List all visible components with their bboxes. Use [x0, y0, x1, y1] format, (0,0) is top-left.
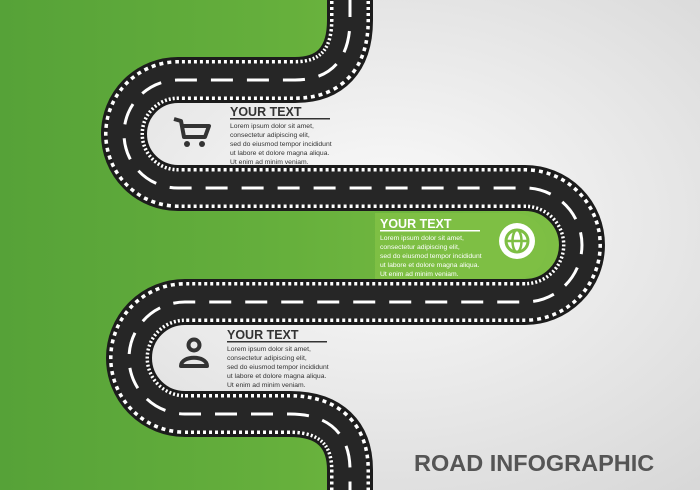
title: ROAD INFOGRAPHIC: [414, 450, 654, 476]
text block 2: consectetur adipiscing elit,: [380, 244, 460, 251]
text block 3: [227, 328, 329, 389]
road: [124, 0, 582, 490]
text block 3: sed do eiusmod tempor incididunt: [227, 364, 329, 371]
text block 3: Lorem ipsum dolor sit amet,: [227, 346, 311, 353]
text block 2: Ut enim ad minim veniam.: [380, 271, 459, 278]
text block 1: consectetur adipiscing elit,: [230, 132, 310, 139]
text block 1: sed do eiusmod tempor incididunt: [230, 141, 332, 148]
text block 2: ut labore et dolore magna aliqua.: [380, 262, 479, 269]
text block 2: sed do eiusmod tempor incididunt: [380, 253, 482, 260]
icon: person: [181, 340, 207, 366]
text block 1: YOUR TEXT: [230, 105, 302, 119]
text block 3: consectetur adipiscing elit,: [227, 355, 307, 362]
text block 1: Lorem ipsum dolor sit amet,: [230, 123, 314, 130]
text block 3: YOUR TEXT: [227, 328, 299, 342]
text block 1: Ut enim ad minim veniam.: [230, 159, 309, 166]
green pill: [375, 213, 547, 279]
text block 3: Ut enim ad minim veniam.: [227, 382, 306, 389]
text block 2: [380, 217, 482, 278]
text block 2: YOUR TEXT: [380, 217, 452, 231]
text block 3: ut labore et dolore magna aliqua.: [227, 373, 326, 380]
text block 2: Lorem ipsum dolor sit amet,: [380, 235, 464, 242]
icon: globe: [499, 223, 535, 259]
text block 1: [230, 105, 332, 166]
icon: shopping cart: [174, 119, 209, 147]
text block 1: ut labore et dolore magna aliqua.: [230, 150, 329, 157]
